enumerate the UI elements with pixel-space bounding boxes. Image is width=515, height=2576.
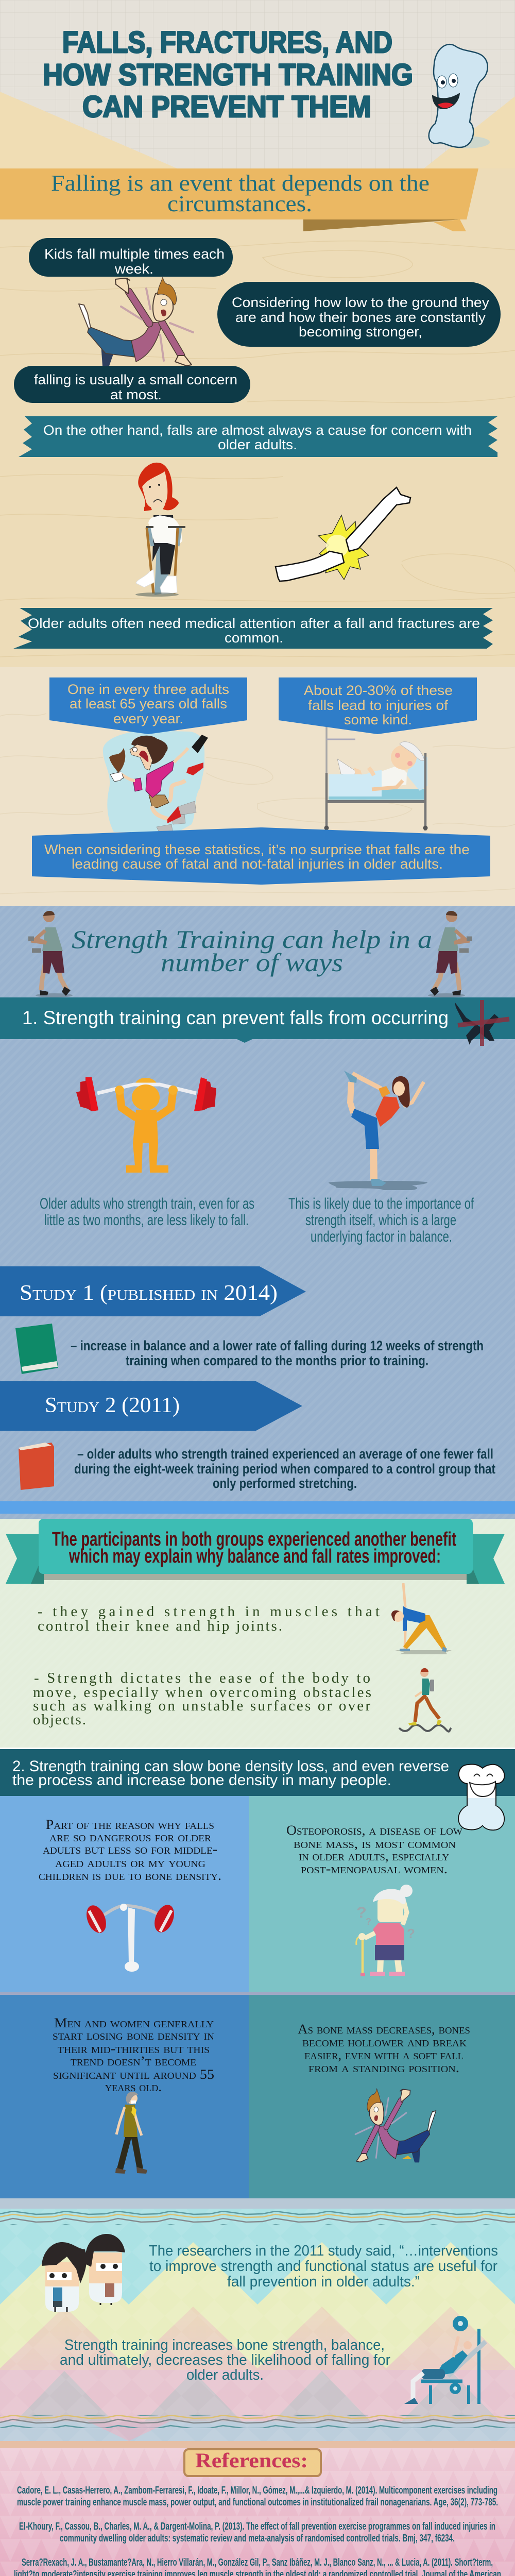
ribbon: medical attention: Older adults often need medical attention after a fall and fractures are — [28, 616, 480, 631]
band — [0, 2198, 515, 2209]
icon: woman with dumbbells right — [428, 911, 472, 997]
bubble: small concern: falling is usually a small concern — [34, 372, 237, 387]
text: strength dictates: objects. — [33, 1711, 86, 1728]
section background: lighter wood panel — [0, 667, 515, 906]
ribbon: older adults concern: older adults. — [218, 437, 297, 452]
section background: header — [0, 0, 515, 168]
panel: losing bone density: Men and women generally — [54, 2015, 214, 2030]
panel: losing bone density: start losing bone density in — [53, 2028, 214, 2043]
text: conclusion: Strength training increases bone strength, balance, — [64, 2337, 385, 2353]
callout: one in three adults: every year. — [113, 711, 183, 726]
icon: older man walking — [115, 2092, 147, 2174]
title: FALLS, FRACTURES, AND — [62, 26, 392, 59]
heading: strength training can help: Strength Training can help in a — [72, 925, 432, 954]
banner: falling depends on circumstances: circumstances. — [167, 191, 312, 216]
icon: bone dumbbell — [83, 1902, 178, 1972]
arrow heading: study 1 — [0, 1266, 306, 1316]
text: conclusion: and ultimately, decreases the likelihood of falling for — [60, 2352, 390, 2368]
text: gained strength: - they gained strength in muscles that — [38, 1603, 380, 1620]
icon: grandmother with cane: ? — [366, 1917, 371, 1927]
icon: man slipping — [355, 2089, 436, 2162]
panel: bone density reason: Part of the reason why falls — [46, 1817, 214, 1832]
icon: grandmother with cane — [356, 1885, 415, 1976]
bubble: low to the ground: are and how their bones are constantly — [235, 310, 486, 325]
section header: prevent falls — [0, 997, 515, 1043]
callout: one in three adults: One in every three adults — [67, 682, 229, 697]
panel: osteoporosis: bone mass, is most common — [294, 1836, 456, 1851]
text: older adults who train: little as two months, are less likely to fall. — [44, 1212, 249, 1229]
text: conclusion — [60, 2337, 390, 2383]
icon: walker on unstable ground — [399, 1668, 451, 1732]
panel: osteoporosis: Osteoporosis, a disease of low — [286, 1823, 462, 1838]
text: researchers quote: to improve strength and functional status are useful for — [149, 2258, 497, 2275]
icon: grandmother with cane: ? — [356, 1904, 367, 1921]
text: study 1 finding: training when compared to the months prior to training. — [126, 1353, 428, 1368]
text: study 2 finding: only performed stretching. — [213, 1476, 357, 1491]
icon: stretching figure — [391, 1583, 452, 1654]
icon: woman on crutches — [135, 463, 185, 597]
bubble: kids fall — [29, 238, 233, 277]
ribbon: older adults concern: On the other hand, falls are almost always a cause for concern with — [43, 422, 472, 438]
arrow heading: study 2 — [0, 1381, 302, 1431]
text: strength dictates: - Strength dictates the ease of the body to — [34, 1670, 370, 1686]
ribbon: older adults concern — [19, 416, 497, 457]
icon: weightlifter — [76, 1077, 216, 1173]
bubble: low to the ground: becoming stronger, — [299, 324, 422, 340]
band — [0, 2441, 515, 2448]
banner: falling depends on circumstances: Falling is an event that depends on the — [51, 171, 430, 196]
section background: triangle pattern — [0, 2209, 515, 2441]
callout: one in three adults — [49, 677, 247, 734]
ribbon heading: another benefit — [6, 1519, 505, 1584]
icon: green book — [15, 1324, 58, 1374]
title: HOW STRENGTH TRAINING — [43, 58, 413, 92]
text: researchers quote: fall prevention in older adults.” — [227, 2274, 420, 2290]
heading: strength training can help — [72, 925, 432, 977]
icon: patient in hospital bed — [324, 720, 427, 831]
icon: banana peel — [402, 2156, 412, 2159]
text: study 1 finding — [71, 1338, 484, 1368]
panel: bones become hollower: As bone mass decreases, bones — [298, 2022, 470, 2037]
bubble: small concern: at most. — [110, 387, 162, 402]
icon: scientists — [42, 2234, 125, 2312]
callout: leading cause of injuries: leading cause of fatal and not-fatal injuries in older adults. — [72, 856, 443, 872]
text: importance of strength — [288, 1195, 474, 1245]
arrow heading: study 1: Study 1 (published in 2014) — [20, 1281, 278, 1305]
section background: strength training blue — [0, 906, 515, 1519]
text: conclusion: older adults. — [186, 2367, 264, 2383]
icon: woman falling on stairs — [103, 731, 208, 832]
text: importance of strength: underlying factor in balance. — [311, 1228, 452, 1245]
panel: bones become hollower: easier, even with a soft fall — [304, 2047, 464, 2062]
panel: bone density reason: children is due to bone density. — [39, 1868, 221, 1883]
icon: woman with dumbbells left — [28, 911, 73, 997]
icon: balancing woman — [329, 1071, 427, 1190]
icon: smiling bone mascot — [429, 44, 490, 148]
callout: leading cause of injuries: When considering these statistics, it’s no surprise that falls are the — [44, 842, 470, 857]
icon: falling man — [79, 277, 193, 366]
panel: losing bone density: trend doesn’t become — [71, 2054, 196, 2069]
bubble: small concern — [14, 366, 250, 403]
section header: prevent falls: 1. Strength training can prevent falls from occurring — [22, 1007, 449, 1028]
panel: osteoporosis: in older adults, especially — [299, 1849, 449, 1863]
panel: bone density reason — [0, 1796, 249, 1992]
section header: bone density — [0, 1749, 515, 1801]
ribbon: medical attention: common. — [225, 630, 283, 646]
heading: strength training can help: number of ways — [161, 948, 343, 977]
bubble: low to the ground — [217, 282, 501, 347]
text: older adults who train: Older adults who strength train, even for as — [40, 1195, 254, 1212]
section header: bone density: the process and increase bone density in many people. — [12, 1772, 391, 1789]
panel: osteoporosis — [249, 1796, 515, 1992]
panel: bones become hollower — [249, 1995, 515, 2198]
divider band — [0, 1501, 515, 1514]
bubble: kids fall: week. — [114, 261, 153, 277]
text: strength dictates: move, especially when overcoming obstacles — [33, 1684, 371, 1701]
plaque: references heading — [184, 2449, 321, 2476]
panel: losing bone density: significant until around 55 — [53, 2067, 214, 2082]
text: importance of strength: strength itself, which is a large — [305, 1212, 456, 1229]
callout: 20-30 percent: some kind. — [344, 712, 412, 727]
text: researchers quote: The researchers in the 2011 study said, “…interventions — [149, 2243, 498, 2259]
icon: grinning bone — [458, 1765, 504, 1830]
banner: falling depends on circumstances — [0, 168, 478, 231]
panel: bone density reason: are so dangerous for older — [49, 1829, 211, 1844]
text: researchers quote — [149, 2243, 498, 2290]
arrow heading: study 2: Study 2 (2011) — [45, 1394, 180, 1417]
icon: broken bone — [276, 487, 410, 581]
text: older adults who train — [40, 1195, 254, 1229]
title: CAN PREVENT THEM — [82, 90, 371, 124]
section header: bone density: 2. Strength training can slow bone density loss, and even reverse — [12, 1758, 449, 1775]
separator — [0, 1992, 515, 1995]
icon: red book — [19, 1443, 54, 1490]
callout: 20-30 percent — [279, 677, 477, 734]
section background: wood panel — [0, 168, 515, 667]
icon: crossed-out falling silhouette — [455, 1000, 509, 1046]
bubble: kids fall: Kids fall multiple times each — [44, 246, 225, 262]
panel: references — [0, 2448, 515, 2576]
panel: bones become hollower: from a standing position. — [308, 2060, 459, 2075]
section background: pale green — [0, 1519, 515, 1748]
callout: 20-30 percent: About 20-30% of these — [304, 683, 453, 698]
text: gained strength: control their knee and hip joints. — [38, 1618, 282, 1634]
text: strength dictates — [33, 1670, 371, 1728]
icon: grandmother with cane: ? — [407, 1926, 415, 1941]
callout: one in three adults: at least 65 years old falls — [70, 696, 227, 711]
plaque: references heading: References: — [195, 2449, 308, 2472]
panel: losing bone density: their mid-thirties but this — [58, 2041, 210, 2056]
panel: bone density reason: aged adults or my young — [55, 1855, 205, 1870]
icon: bench press — [404, 2316, 486, 2404]
panel: bones become hollower: become hollower and break — [302, 2035, 467, 2049]
bubble: low to the ground: Considering how low to the ground they — [232, 295, 490, 310]
ribbon: medical attention — [13, 608, 493, 649]
panel: losing bone density — [0, 1995, 249, 2198]
text: gained strength — [38, 1603, 380, 1634]
panel: bone density reason: adults but less so for middle- — [43, 1842, 217, 1857]
callout: leading cause of injuries — [32, 827, 490, 885]
callout: 20-30 percent: falls lead to injuries of — [308, 698, 449, 713]
panel: osteoporosis: post-menopausal women. — [301, 1861, 448, 1876]
title — [43, 26, 413, 124]
text: study 2 finding — [74, 1446, 495, 1491]
text: strength dictates: such as walking on unstable surfaces or over — [33, 1698, 370, 1714]
panel: losing bone density: years old. — [105, 2079, 162, 2094]
